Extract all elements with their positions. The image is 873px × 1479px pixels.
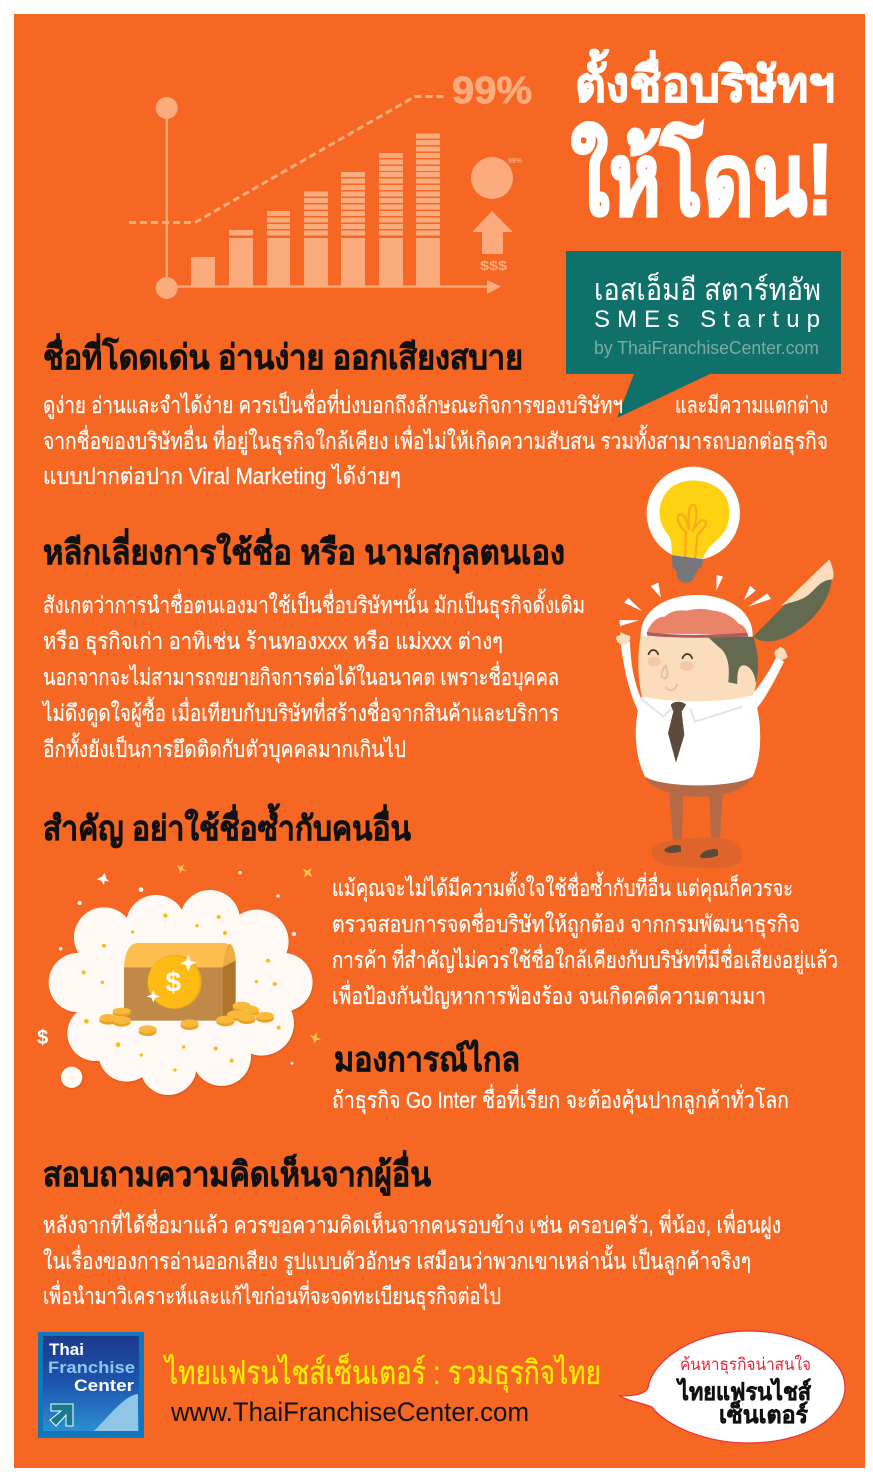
title	[571, 49, 835, 236]
section 3 heading: สำคัญ อย่าใช้ชื่อซ้ำกับคนอื่น	[43, 803, 411, 849]
speech bubble: ค้นหาธุรกิจน่าสนใจ	[680, 1354, 811, 1375]
illustration: happy man with open head	[616, 559, 834, 868]
section 1 text: แบบปากต่อปาก Viral Marketing ได้ง่ายๆ	[43, 463, 401, 489]
stars	[37, 871, 296, 1065]
section 5 text: ในเรื่องของการอ่านออกเสียง รูปแบบตัวอักษร เสมือนว่าพวกเขาเหล่านั้น เป็นลูกค้าจริงๆ	[43, 1245, 751, 1275]
shadow	[651, 838, 743, 868]
section 3 text: ตรวจสอบการจดชื่อบริษัทให้ถูกต้อง จากกรมพัฒนาธุรกิจ	[332, 908, 800, 938]
tie	[668, 702, 686, 763]
speech bubble: เซ็นเตอร์	[719, 1400, 808, 1429]
legs	[645, 777, 753, 797]
section 2 text: ไม่ดึงดูดใจผู้ซื้อ เมื่อเทียบกับบริษัทที่สร้างชื่อจากสินค้าและบริการ	[41, 697, 559, 727]
callout: SMEs Startup	[566, 251, 841, 418]
bar chart: 99%	[452, 70, 532, 112]
section 2 text	[41, 589, 585, 763]
section 2 text: อีกทั้งยังเป็นการยึดติดกับตัวบุคคลมากเกินไป	[43, 733, 406, 763]
speech bubble	[620, 1331, 845, 1443]
section 1 text: ดูง่าย อ่านและจำได้ง่าย ควรเป็นชื่อที่บ่งบอกถึงลักษณะกิจการของบริษัทฯ	[43, 389, 623, 419]
logo: Thai Franchise Center: Franchise	[48, 1358, 135, 1377]
callout: SMEs Startup: เอสเอ็มอี สตาร์ทอัพ	[594, 271, 821, 307]
section 5 text	[43, 1209, 781, 1310]
section 1 text: และมีความแตกต่าง	[675, 392, 828, 418]
section 2 text: สังเกตว่าการนำชื่อตนเองมาใช้เป็นชื่อบริษัทฯนั้น มักเป็นธุรกิจดั้งเดิม	[43, 589, 585, 619]
section 5 text: เพื่อนำมาวิเคราะห์และแก้ไขก่อนที่จะจดทะเบียนธุรกิจต่อไป	[43, 1280, 501, 1310]
section 3 text: เพื่อป้องกันปัญหาการฟ้องร้อง จนเกิดคดีความตามมา	[332, 980, 766, 1009]
section 4 heading: มองการณ์ไกล	[334, 1039, 520, 1079]
footer url: www.ThaiFranchiseCenter.com	[170, 1397, 529, 1427]
section 2 text: หรือ ธุรกิจเก่า อาทิเช่น ร้านทองxxx หรือ แม่xxx ต่างๆ	[43, 628, 503, 655]
section 1 heading: ชื่อที่โดดเด่น อ่านง่าย ออกเสียงสบาย	[43, 333, 523, 377]
coins	[99, 1004, 274, 1036]
title: ตั้งชื่อบริษัทฯ	[575, 49, 835, 112]
logo: Thai Franchise Center	[38, 1332, 144, 1438]
logo: Thai Franchise Center: Center	[74, 1376, 134, 1395]
section 1 text	[43, 389, 828, 489]
chest	[124, 943, 236, 967]
footer slogan: ไทยแฟรนไชส์เซ็นเตอร์ : รวมธุรกิจไทย	[163, 1353, 601, 1393]
logo: Thai Franchise Center: Thai	[49, 1340, 84, 1359]
open scalp	[753, 559, 833, 641]
cloud	[49, 890, 313, 1095]
section 2 text: นอกจากจะไม่สามารถขยายกิจการต่อได้ในอนาคต เพราะชื่อบุคคล	[43, 661, 559, 691]
callout: SMEs Startup: SMEs Startup	[594, 306, 820, 333]
section 2 heading: หลีกเลี่ยงการใช้ชื่อ หรือ นามสกุลตนเอง	[43, 528, 565, 574]
illustration: thought cloud with treasure chest	[37, 864, 321, 1095]
icon: light bulb	[647, 467, 740, 583]
section 5 heading: สอบถามความคิดเห็นจากผู้อื่น	[43, 1150, 431, 1196]
arms	[621, 642, 643, 712]
stars: $	[37, 1027, 48, 1049]
face	[648, 657, 661, 667]
callout: SMEs Startup: by ThaiFranchiseCenter.com	[594, 338, 819, 358]
head	[638, 637, 757, 701]
section 3 text	[332, 872, 838, 1009]
body	[636, 695, 760, 785]
bar chart	[129, 70, 532, 299]
bar chart: $$$	[480, 258, 508, 273]
dots	[82, 914, 281, 1072]
sparks	[619, 575, 771, 626]
speech bubble: ไทยแฟรนไชส์	[675, 1377, 811, 1406]
illustration: thought cloud with treasure chest: $	[166, 967, 182, 998]
section 4 text: ถ้าธุรกิจ Go Inter ชื่อที่เรียก จะต้องคุ้นปากลูกค้าทั่วโลก	[332, 1084, 789, 1114]
bar chart: 99%	[508, 158, 523, 165]
